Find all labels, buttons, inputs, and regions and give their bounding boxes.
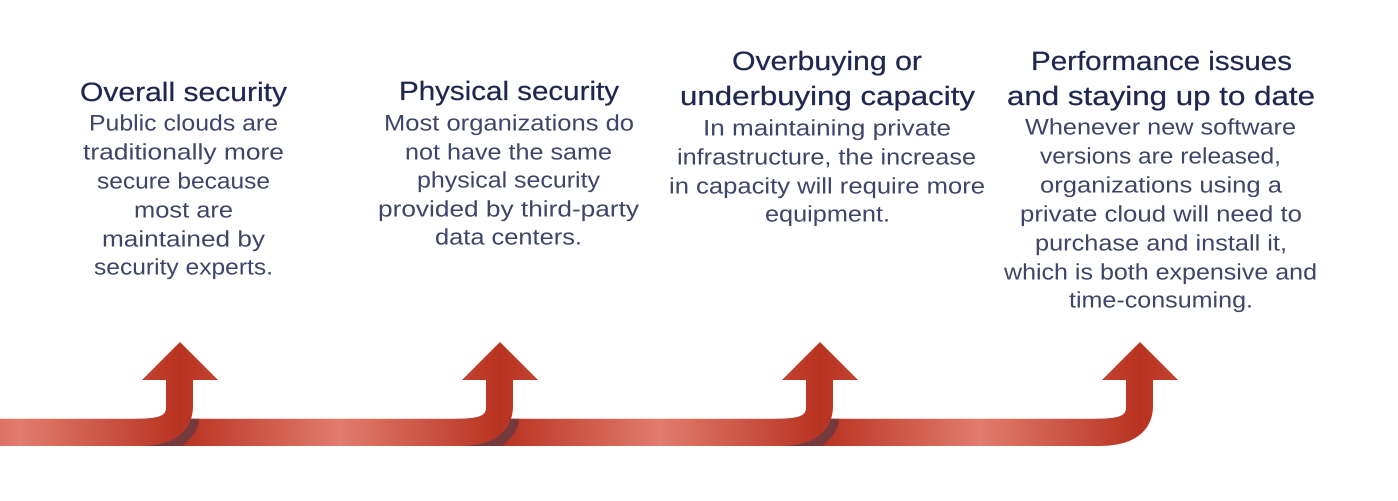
body text: [83, 110, 284, 279]
body text: private cloud will need to: [1020, 201, 1302, 226]
heading: underbuying capacity: [680, 81, 976, 111]
arrow 1: [0, 342, 218, 446]
heading: Performance issues: [1031, 46, 1292, 76]
column 4: performance issues: [1003, 46, 1317, 312]
body text: Public clouds are: [89, 110, 278, 135]
body text: [1003, 114, 1317, 312]
body text: Most organizations do: [384, 110, 634, 135]
body text: versions are released,: [1040, 143, 1281, 168]
body text: physical security: [417, 167, 601, 192]
body text: In maintaining private: [703, 115, 951, 140]
body text: purchase and install it,: [1035, 230, 1287, 255]
body text: in capacity will require more: [669, 173, 985, 198]
body text: not have the same: [405, 139, 612, 164]
body text: Whenever new software: [1025, 114, 1296, 139]
body text: time-consuming.: [1069, 287, 1253, 312]
arrow 4: [820, 342, 1178, 446]
arrow 1 shadow: [135, 419, 199, 446]
arrow 3: [500, 342, 858, 446]
heading: Overbuying or: [732, 46, 922, 76]
body text: organizations using a: [1040, 172, 1283, 197]
heading: Physical security: [399, 76, 620, 106]
body text: security experts.: [94, 254, 273, 279]
heading: [680, 46, 976, 111]
body text: [669, 115, 985, 226]
body text: most are: [134, 197, 233, 222]
body text: equipment.: [765, 201, 890, 226]
heading: and staying up to date: [1007, 81, 1315, 111]
body text: traditionally more: [83, 139, 284, 164]
heading: [1007, 46, 1315, 111]
body text: secure because: [97, 168, 270, 193]
body text: [378, 110, 640, 249]
arrow 2: [180, 342, 538, 446]
body text: provided by third-party: [378, 196, 640, 221]
column 3: overbuying or underbuying capacity: [669, 46, 985, 226]
arrow 2 shadow: [455, 419, 519, 446]
body text: infrastructure, the increase: [677, 144, 976, 169]
body text: which is both expensive and: [1003, 259, 1317, 284]
body text: data centers.: [435, 224, 582, 249]
heading: Overall security: [80, 77, 288, 107]
body text: maintained by: [102, 226, 266, 251]
column 2: physical security: [378, 76, 640, 249]
column 1: overall security: [80, 77, 288, 279]
arrow 3 shadow: [775, 419, 839, 446]
